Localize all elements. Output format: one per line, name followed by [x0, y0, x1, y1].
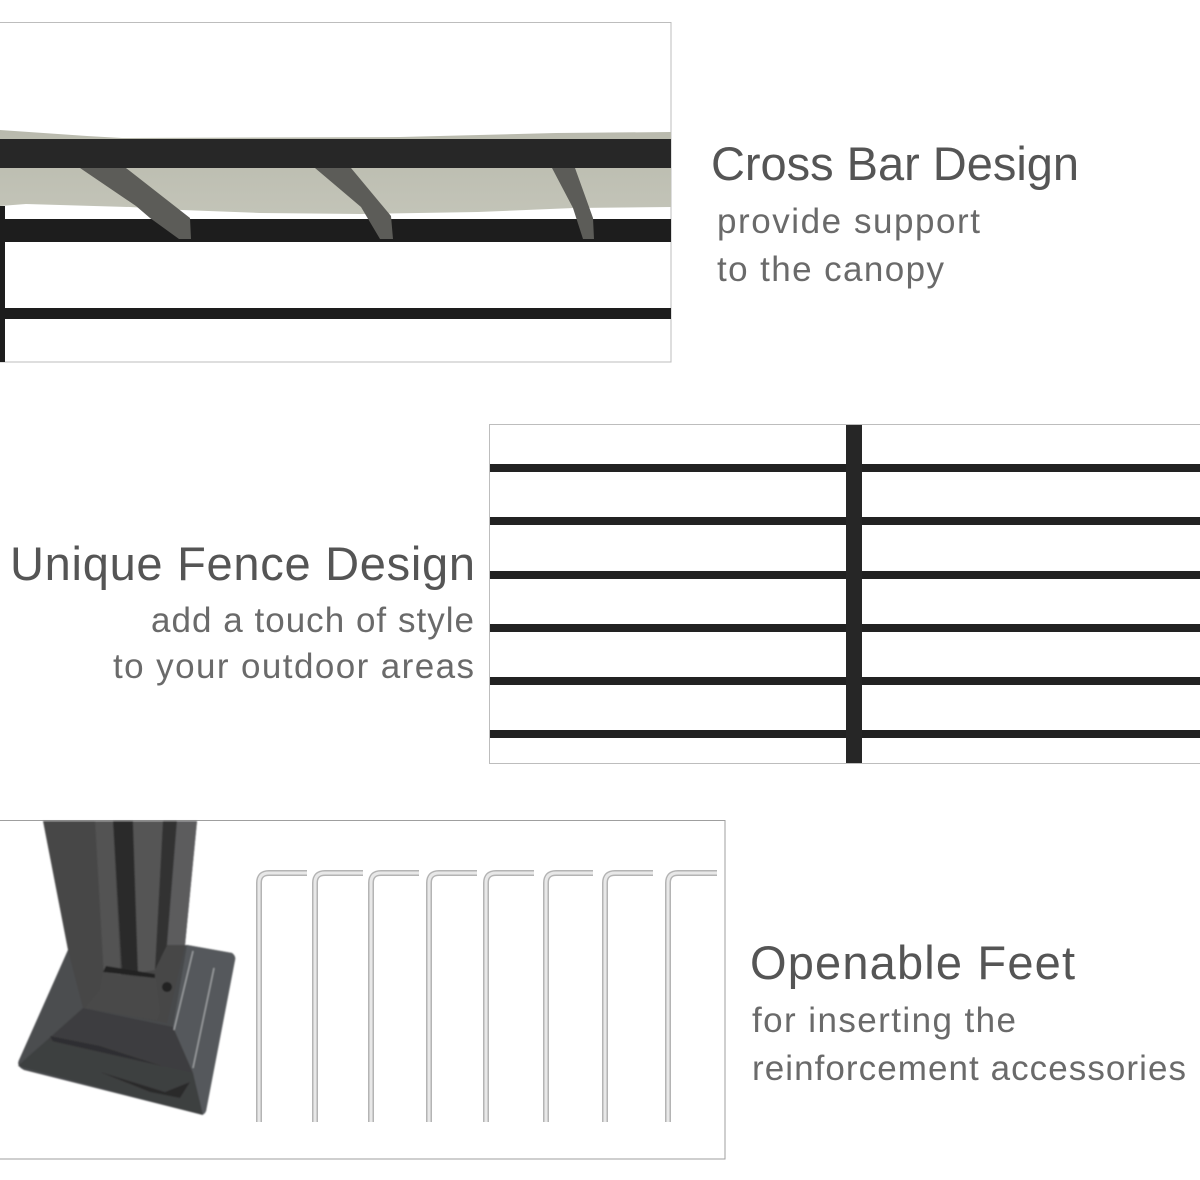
text: feet description	[752, 1001, 1186, 1088]
panel: feet and pins photo	[0, 820, 725, 1159]
support braces	[80, 168, 594, 239]
panel: fence photo	[490, 424, 1200, 764]
heading: unique fence design: Unique Fence Design	[10, 537, 475, 590]
icon: reinforcement pins	[259, 873, 717, 1122]
text: cross bar description	[717, 202, 980, 289]
panel: cross bar photo	[0, 22, 671, 362]
canopy fabric	[0, 130, 671, 214]
heading: cross bar design: Cross Bar Design	[711, 137, 1079, 190]
fence rails	[490, 464, 1200, 738]
text: cross bar description: provide support	[717, 202, 980, 241]
text: cross bar description: to the canopy	[717, 250, 944, 289]
text: fence description: add a touch of style	[151, 601, 474, 640]
bottom frame bar	[0, 308, 671, 319]
vertical post	[0, 206, 5, 362]
text: feet description: reinforcement accessories	[752, 1049, 1186, 1088]
fence post	[846, 425, 862, 763]
text: feet description: for inserting the	[752, 1001, 1016, 1040]
heading: openable feet: Openable Feet	[750, 936, 1075, 989]
upper frame bar	[0, 139, 671, 168]
text: fence description: to your outdoor areas	[113, 647, 474, 686]
text: fence description	[113, 601, 474, 686]
lower frame bar	[0, 219, 671, 242]
icon: post foot	[18, 821, 235, 1115]
